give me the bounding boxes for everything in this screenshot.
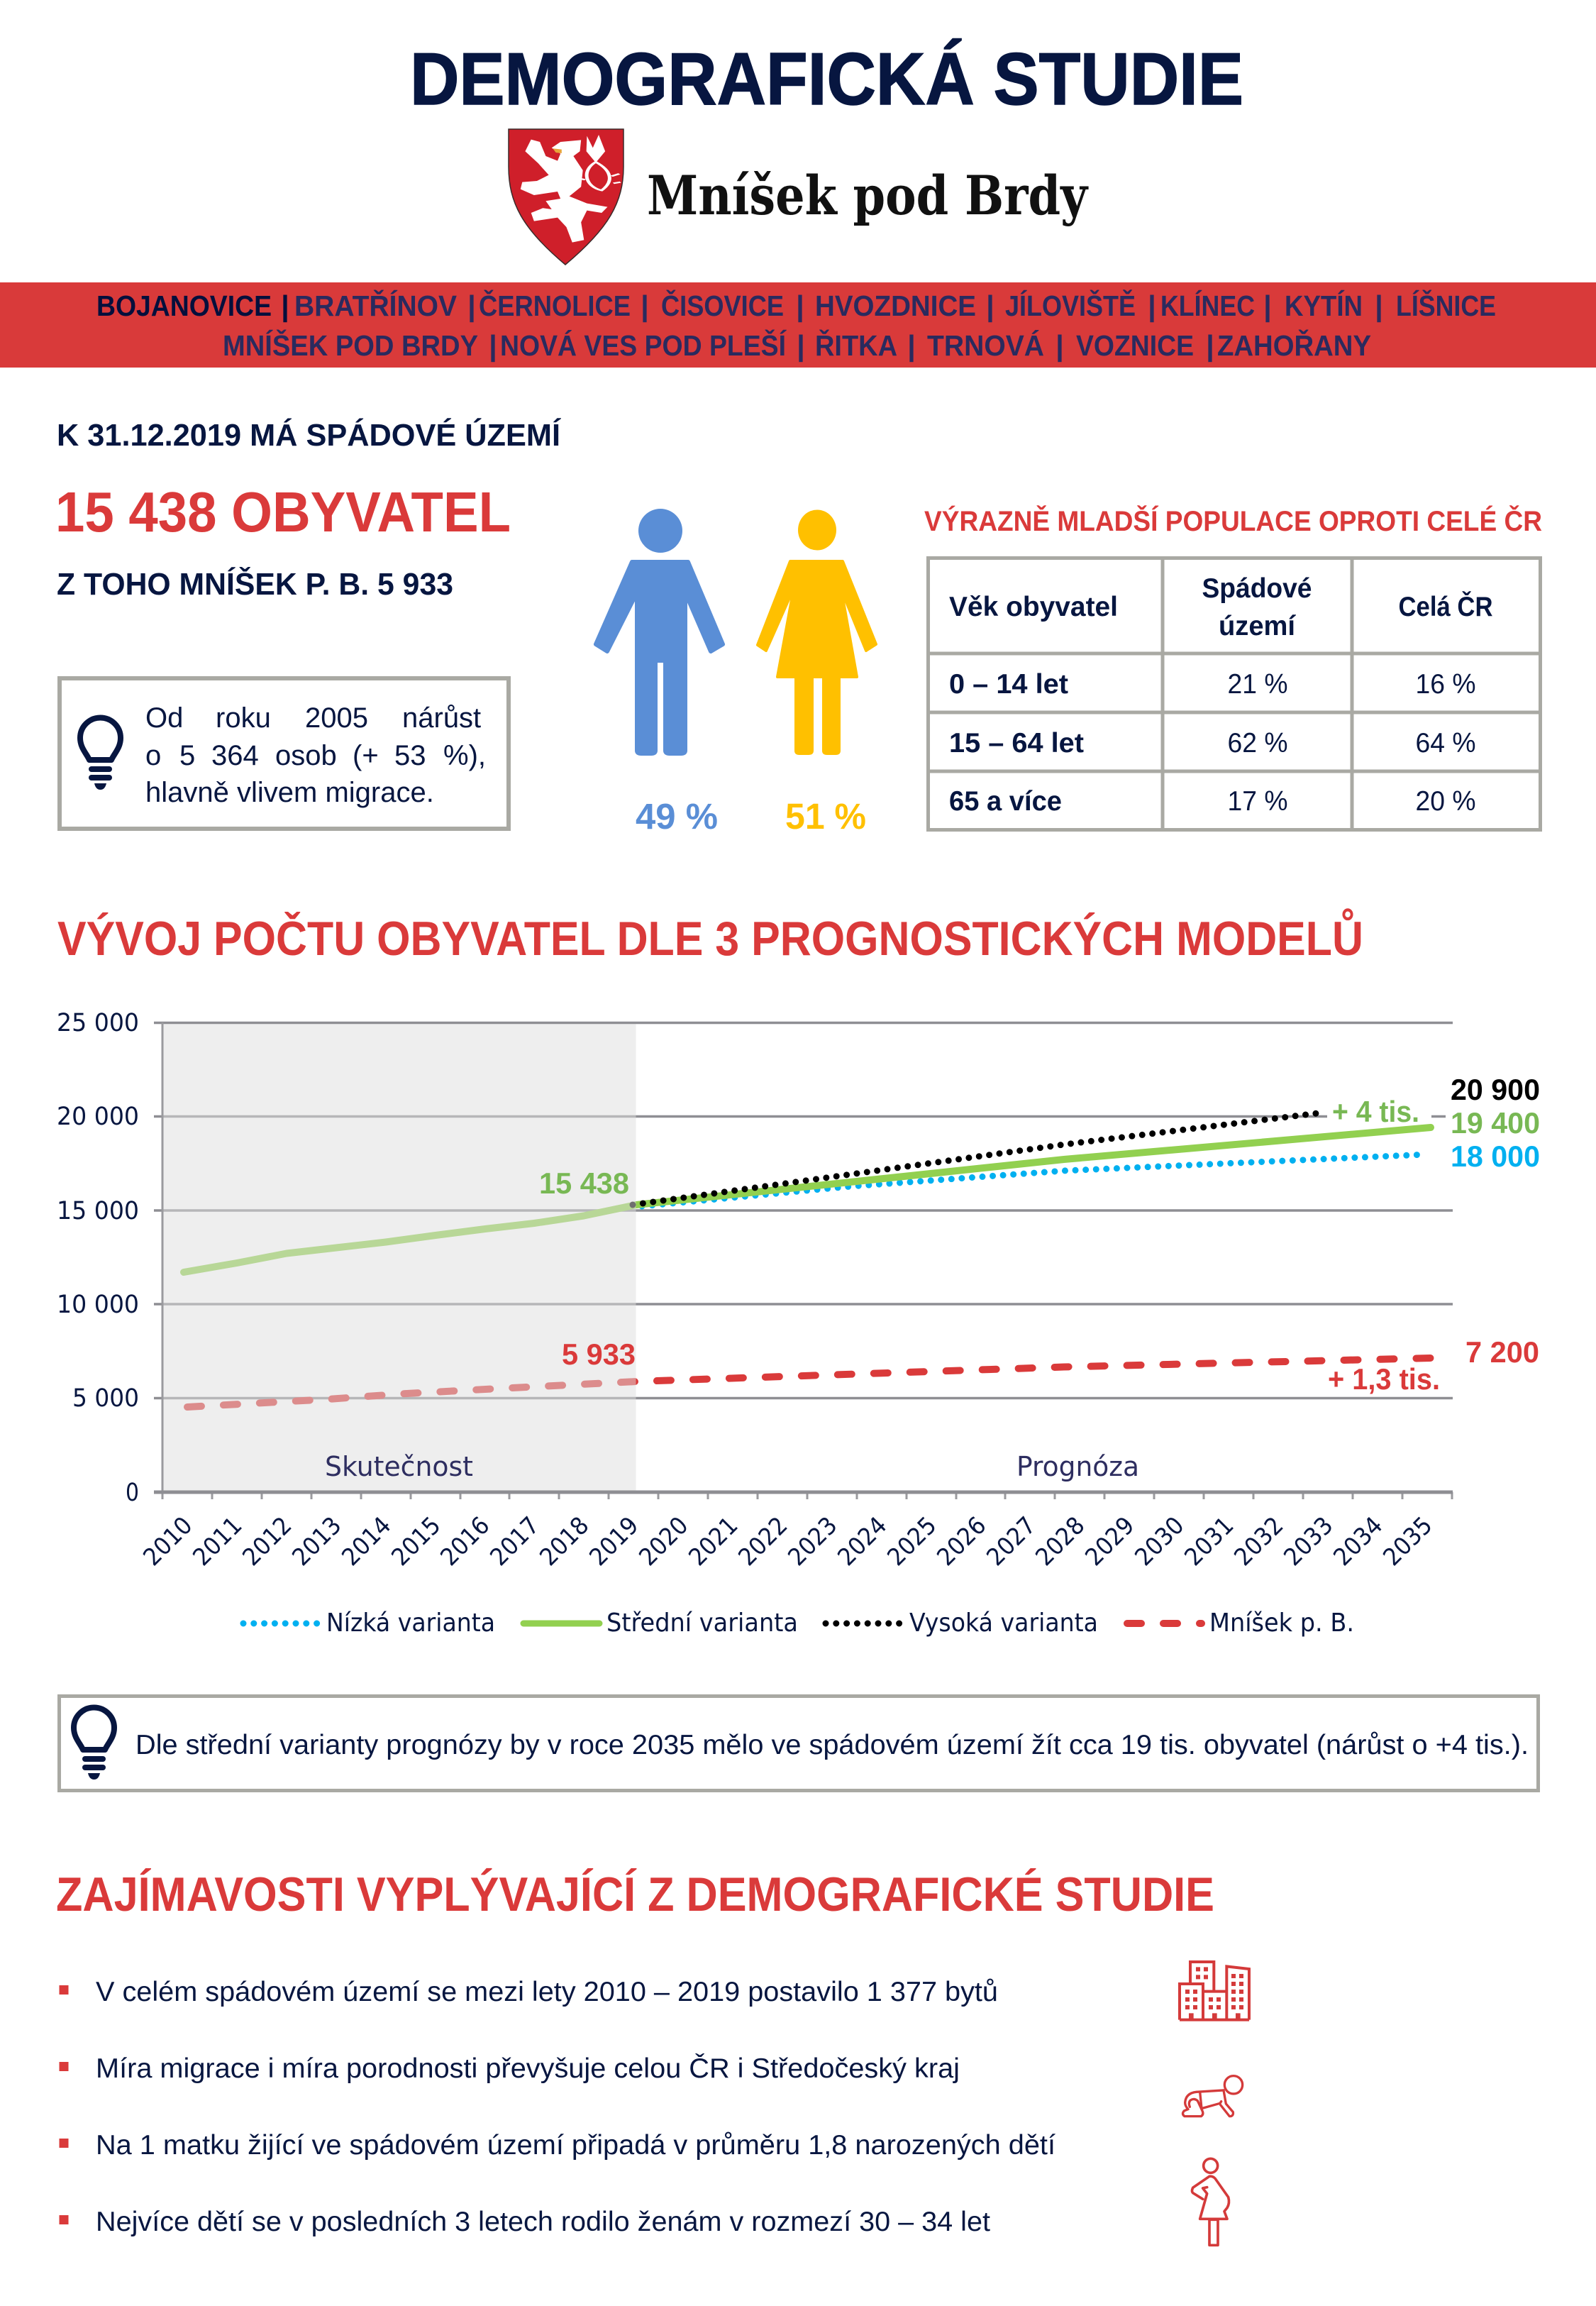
value: 15 438: 15 438 bbox=[539, 1166, 629, 1200]
table: age structure bbox=[928, 558, 1541, 830]
legend: Mníšek p. B.: Mníšek p. B. bbox=[1209, 1609, 1354, 1638]
series: Mníšek p. B. bbox=[187, 1358, 1431, 1407]
icon: light bulb bbox=[74, 1707, 114, 1780]
icon: heraldic shield with lion bbox=[509, 129, 624, 265]
x axis labels: 2011 bbox=[188, 1511, 248, 1572]
municipalities line 1 bbox=[96, 289, 1496, 322]
municipalities line 2: TRNOVÁ bbox=[927, 329, 1044, 362]
row 0–14: 21 % bbox=[1227, 669, 1288, 700]
municipalities line 1: | bbox=[1148, 289, 1156, 322]
title: DEMOGRAFICKÁ STUDIE bbox=[410, 38, 1243, 121]
legend bbox=[243, 1609, 1354, 1638]
callout text: roku bbox=[216, 702, 271, 734]
x axis labels: 2027 bbox=[982, 1511, 1041, 1572]
value: high variant 20 900: 20 900 bbox=[1451, 1073, 1540, 1106]
x axis labels: 2023 bbox=[783, 1511, 843, 1572]
callout text: 53 bbox=[394, 740, 426, 771]
y axis labels: 25 000 bbox=[57, 1009, 139, 1037]
x axis labels: 2022 bbox=[733, 1511, 793, 1572]
text: date intro: K 31.12.2019 MÁ SPÁDOVÉ ÚZEMÍ bbox=[57, 417, 562, 453]
municipalities line 2: ŘITKA bbox=[815, 329, 897, 362]
row 15–64: 64 % bbox=[1416, 728, 1475, 758]
y axis labels: 15 000 bbox=[57, 1197, 139, 1225]
callout text: 5 bbox=[179, 740, 195, 771]
series: low variant bbox=[642, 1155, 1419, 1206]
callout text: (+ bbox=[353, 740, 379, 771]
value: middle variant 19 400: 19 400 bbox=[1451, 1106, 1540, 1140]
x axis labels: 2013 bbox=[287, 1511, 347, 1572]
municipalities line 1: KLÍNEC bbox=[1160, 289, 1255, 322]
row 15–64: 62 % bbox=[1227, 728, 1288, 758]
callout text: hlavně vlivem migrace. bbox=[145, 777, 434, 808]
item: age of mothers: Nejvíce dětí se v posledních 3 letech rodilo ženám v rozmezí 30 – 34 let bbox=[96, 2207, 990, 2237]
callout text: Od bbox=[145, 702, 183, 734]
legend: high variant: Vysoká varianta bbox=[909, 1609, 1098, 1638]
male share: 49 % bbox=[636, 796, 718, 837]
municipalities line 1: BOJANOVICE bbox=[96, 289, 272, 322]
x axis labels: 2031 bbox=[1180, 1511, 1239, 1572]
x axis labels: 2024 bbox=[833, 1511, 892, 1572]
callout text: %), bbox=[443, 740, 486, 771]
series: middle variant bbox=[184, 1127, 1431, 1272]
municipalities line 1: KYTÍN bbox=[1285, 289, 1363, 322]
y axis labels: 5 000 bbox=[72, 1384, 139, 1413]
row 65+: 20 % bbox=[1416, 786, 1475, 817]
delta: +1,3 thousand: + 1,3 tis. bbox=[1328, 1362, 1440, 1396]
callout: growth since 2005 bbox=[60, 678, 509, 829]
x axis labels: 2029 bbox=[1080, 1511, 1140, 1572]
axis baseline bbox=[154, 1490, 1453, 1494]
icon: pregnant woman bbox=[1192, 2158, 1229, 2245]
delta: +4 thousand: + 4 tis. bbox=[1332, 1095, 1419, 1128]
big number: population: 15 438 OBYVATEL bbox=[55, 480, 511, 544]
legend: low variant: Nízká varianta bbox=[326, 1609, 495, 1638]
icon: crawling baby bbox=[1182, 2076, 1243, 2117]
municipalities line 2: | bbox=[489, 329, 497, 362]
x axis labels bbox=[138, 1511, 1438, 1572]
municipalities line 2: | bbox=[907, 329, 916, 362]
municipalities line 2: ZAHOŘANY bbox=[1217, 329, 1371, 362]
x axis labels: 2019 bbox=[584, 1511, 644, 1572]
x axis labels: 2033 bbox=[1279, 1511, 1339, 1572]
municipalities line 1: BRATŘÍNOV bbox=[294, 289, 458, 322]
x axis labels: 2016 bbox=[436, 1511, 495, 1572]
heading: younger population: VÝRAZNĚ MLADŠÍ POPULACE OPROTI CELÉ ČR bbox=[924, 504, 1542, 537]
row 65+ bbox=[949, 786, 1475, 817]
table header: Spádové bbox=[1202, 573, 1312, 604]
row 0–14 bbox=[949, 669, 1475, 700]
x axis labels: 2018 bbox=[535, 1511, 594, 1572]
x axis labels: 2015 bbox=[387, 1511, 446, 1572]
heading: population models: VÝVOJ POČTU OBYVATEL DLE 3 PROGNOSTICKÝCH MODELŮ bbox=[57, 907, 1363, 966]
x axis labels: 2020 bbox=[634, 1511, 694, 1572]
callout text: 364 bbox=[211, 740, 259, 771]
callout text: nárůst bbox=[402, 702, 481, 734]
municipalities line 1: HVOZDNICE bbox=[815, 289, 976, 322]
municipalities line 1: JÍLOVIŠTĚ bbox=[1005, 289, 1136, 322]
municipalities line 1: | bbox=[467, 289, 476, 322]
row 15–64: 15 – 64 let bbox=[949, 728, 1084, 758]
y axis labels bbox=[57, 1009, 139, 1507]
row 65+: 65 a více bbox=[949, 786, 1062, 817]
line chart: population development bbox=[57, 1009, 1540, 1638]
icon: light bulb bbox=[80, 718, 121, 790]
row 0–14: 16 % bbox=[1416, 669, 1475, 700]
text: of which Mníšek: Z TOHO MNÍŠEK P. B. 5 933 bbox=[57, 566, 453, 602]
y axis labels: 0 bbox=[126, 1479, 139, 1507]
municipalities line 1: | bbox=[1375, 289, 1383, 322]
table header: Věk obyvatel bbox=[949, 592, 1118, 622]
x axis labels: 2032 bbox=[1229, 1511, 1289, 1572]
value: 7 200: 7 200 bbox=[1465, 1335, 1539, 1369]
municipalities line 1: ČISOVICE bbox=[661, 289, 784, 322]
x axis labels: 2014 bbox=[337, 1511, 397, 1572]
x axis labels: 2028 bbox=[1031, 1511, 1090, 1572]
row 0–14: 0 – 14 let bbox=[949, 669, 1068, 700]
y axis labels: 10 000 bbox=[57, 1291, 139, 1319]
series: high variant bbox=[633, 1113, 1323, 1205]
item: migration: Míra migrace i míra porodnosti převyšuje celou ČR i Středočeský kraj bbox=[96, 2053, 960, 2084]
label: forecast: Prognóza bbox=[1016, 1451, 1139, 1482]
legend: middle variant: Střední varianta bbox=[606, 1609, 798, 1638]
town name: Mníšek pod Brdy bbox=[647, 164, 1089, 227]
municipalities line 1: LÍŠNICE bbox=[1396, 289, 1496, 322]
municipalities line 2: | bbox=[797, 329, 805, 362]
list: findings bbox=[60, 1977, 1055, 2237]
icon: woman figure bbox=[758, 509, 876, 754]
x axis labels: 2017 bbox=[485, 1511, 545, 1572]
callout: forecast summary bbox=[60, 1696, 1538, 1791]
x axis labels: 2030 bbox=[1130, 1511, 1190, 1572]
value: low variant 18 000: 18 000 bbox=[1451, 1140, 1540, 1173]
callout text: Dle střední varianty prognózy by v roce 2035 mělo ve spádovém území žít cca 19 tis. obyvatel (nárůst o +4 tis.). bbox=[135, 1730, 1529, 1760]
table header bbox=[949, 573, 1492, 641]
row 65+: 17 % bbox=[1227, 786, 1288, 817]
municipalities line 1: | bbox=[796, 289, 804, 322]
callout text: o bbox=[145, 740, 161, 771]
municipalities line 2: | bbox=[1206, 329, 1214, 362]
x axis labels: 2012 bbox=[238, 1511, 297, 1572]
logo: coat of arms and town name bbox=[509, 129, 1089, 265]
heading: findings: ZAJÍMAVOSTI VYPLÝVAJÍCÍ Z DEMOGRAFICKÉ STUDIE bbox=[56, 1868, 1214, 1921]
icon: man figure bbox=[596, 509, 723, 754]
municipalities line 2 bbox=[223, 329, 1371, 362]
item: births per mother: Na 1 matku žijící ve spádovém území připadá v průměru 1,8 narozených dětí bbox=[96, 2130, 1055, 2161]
x axis labels: 2035 bbox=[1378, 1511, 1438, 1572]
item: housing: V celém spádovém území se mezi lety 2010 – 2019 postavilo 1 377 bytů bbox=[96, 1977, 998, 2007]
value: 5 933: 5 933 bbox=[562, 1337, 636, 1371]
municipalities line 1: | bbox=[1263, 289, 1272, 322]
municipalities line 2: | bbox=[1055, 329, 1064, 362]
municipalities line 1: | bbox=[281, 289, 289, 322]
label: actual: Skutečnost bbox=[325, 1451, 473, 1482]
female share: 51 % bbox=[785, 796, 866, 837]
icon: buildings bbox=[1180, 1962, 1249, 2020]
callout text: osob bbox=[275, 740, 337, 771]
table header: Celá ČR bbox=[1399, 590, 1492, 622]
x axis labels: 2021 bbox=[684, 1511, 743, 1572]
x axis labels: 2034 bbox=[1329, 1511, 1388, 1572]
municipalities line 1: | bbox=[641, 289, 649, 322]
municipalities band bbox=[0, 282, 1596, 368]
x axis labels: 2010 bbox=[138, 1511, 198, 1572]
x axis labels: 2026 bbox=[932, 1511, 992, 1572]
municipalities line 2: NOVÁ VES POD PLEŠÍ bbox=[500, 329, 787, 362]
table header: území bbox=[1219, 611, 1296, 641]
municipalities line 1: ČERNOLICE bbox=[479, 289, 631, 322]
municipalities line 2: VOZNICE bbox=[1076, 329, 1194, 362]
municipalities line 2: MNÍŠEK POD BRDY bbox=[223, 329, 478, 362]
x axis labels: 2025 bbox=[882, 1511, 942, 1572]
row 15–64 bbox=[949, 728, 1475, 758]
shaded area: actual data bbox=[163, 1025, 636, 1490]
callout text: 2005 bbox=[305, 702, 368, 734]
y axis labels: 20 000 bbox=[57, 1103, 139, 1131]
municipalities line 1: | bbox=[986, 289, 994, 322]
